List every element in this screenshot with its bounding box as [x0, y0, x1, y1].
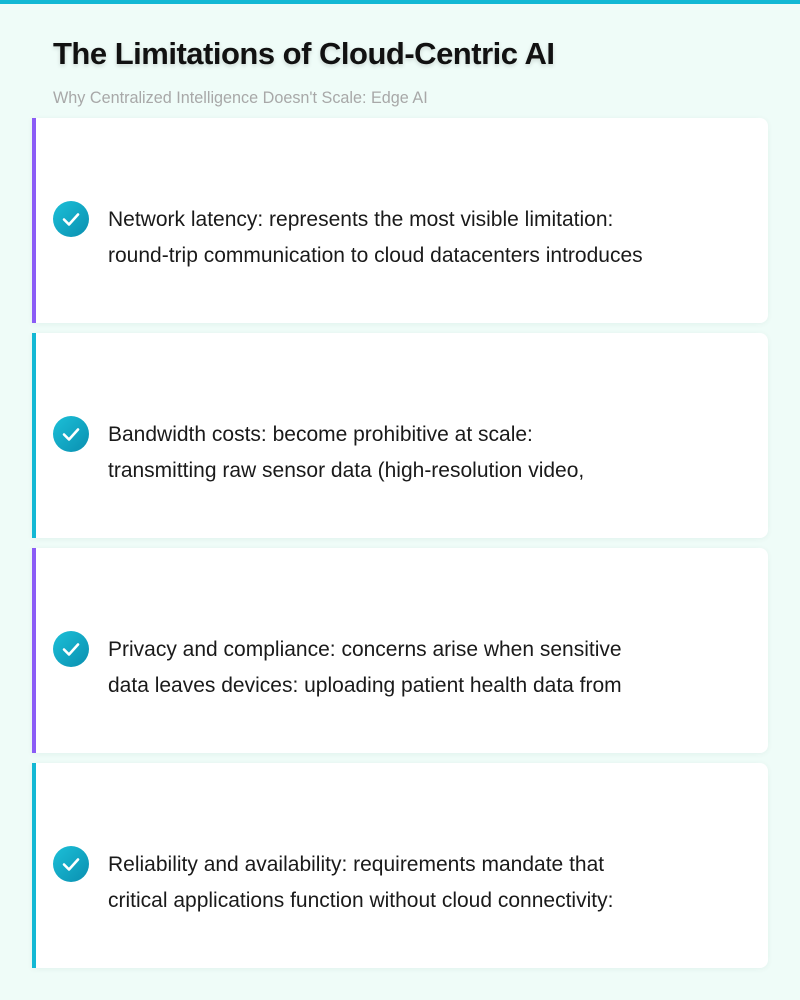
text: privacy — [108, 638, 622, 697]
icon: check — [53, 201, 89, 237]
text: bandwidth: Bandwidth costs: become prohibitive at scale: — [108, 423, 533, 446]
text: reliability — [108, 853, 613, 912]
text: bandwidth: transmitting raw sensor data (high-resolution video, — [108, 459, 584, 482]
icon: check — [53, 416, 89, 452]
text: reliability: Reliability and availability: requirements mandate that — [108, 853, 604, 876]
text: reliability: critical applications function without cloud connectivity: — [108, 889, 613, 912]
text: privacy: Privacy and compliance: concerns arise when sensitive — [108, 638, 622, 661]
subtitle: Why Centralized Intelligence Doesn't Scale: Edge AI — [53, 89, 428, 107]
icon: check — [53, 846, 89, 882]
text: network latency: round-trip communication to cloud datacenters introduces — [108, 244, 643, 267]
title: The Limitations of Cloud-Centric AI — [53, 36, 554, 71]
panel: reliability — [32, 763, 768, 968]
text: bandwidth — [108, 423, 584, 482]
panel: privacy — [32, 548, 768, 753]
panel: bandwidth costs — [32, 333, 768, 538]
text: privacy: data leaves devices: uploading patient health data from — [108, 674, 622, 697]
text: network latency — [108, 208, 643, 267]
panel: network latency — [32, 118, 768, 323]
text: network latency: Network latency: represents the most visible limitation: — [108, 208, 613, 231]
icon: check — [53, 631, 89, 667]
